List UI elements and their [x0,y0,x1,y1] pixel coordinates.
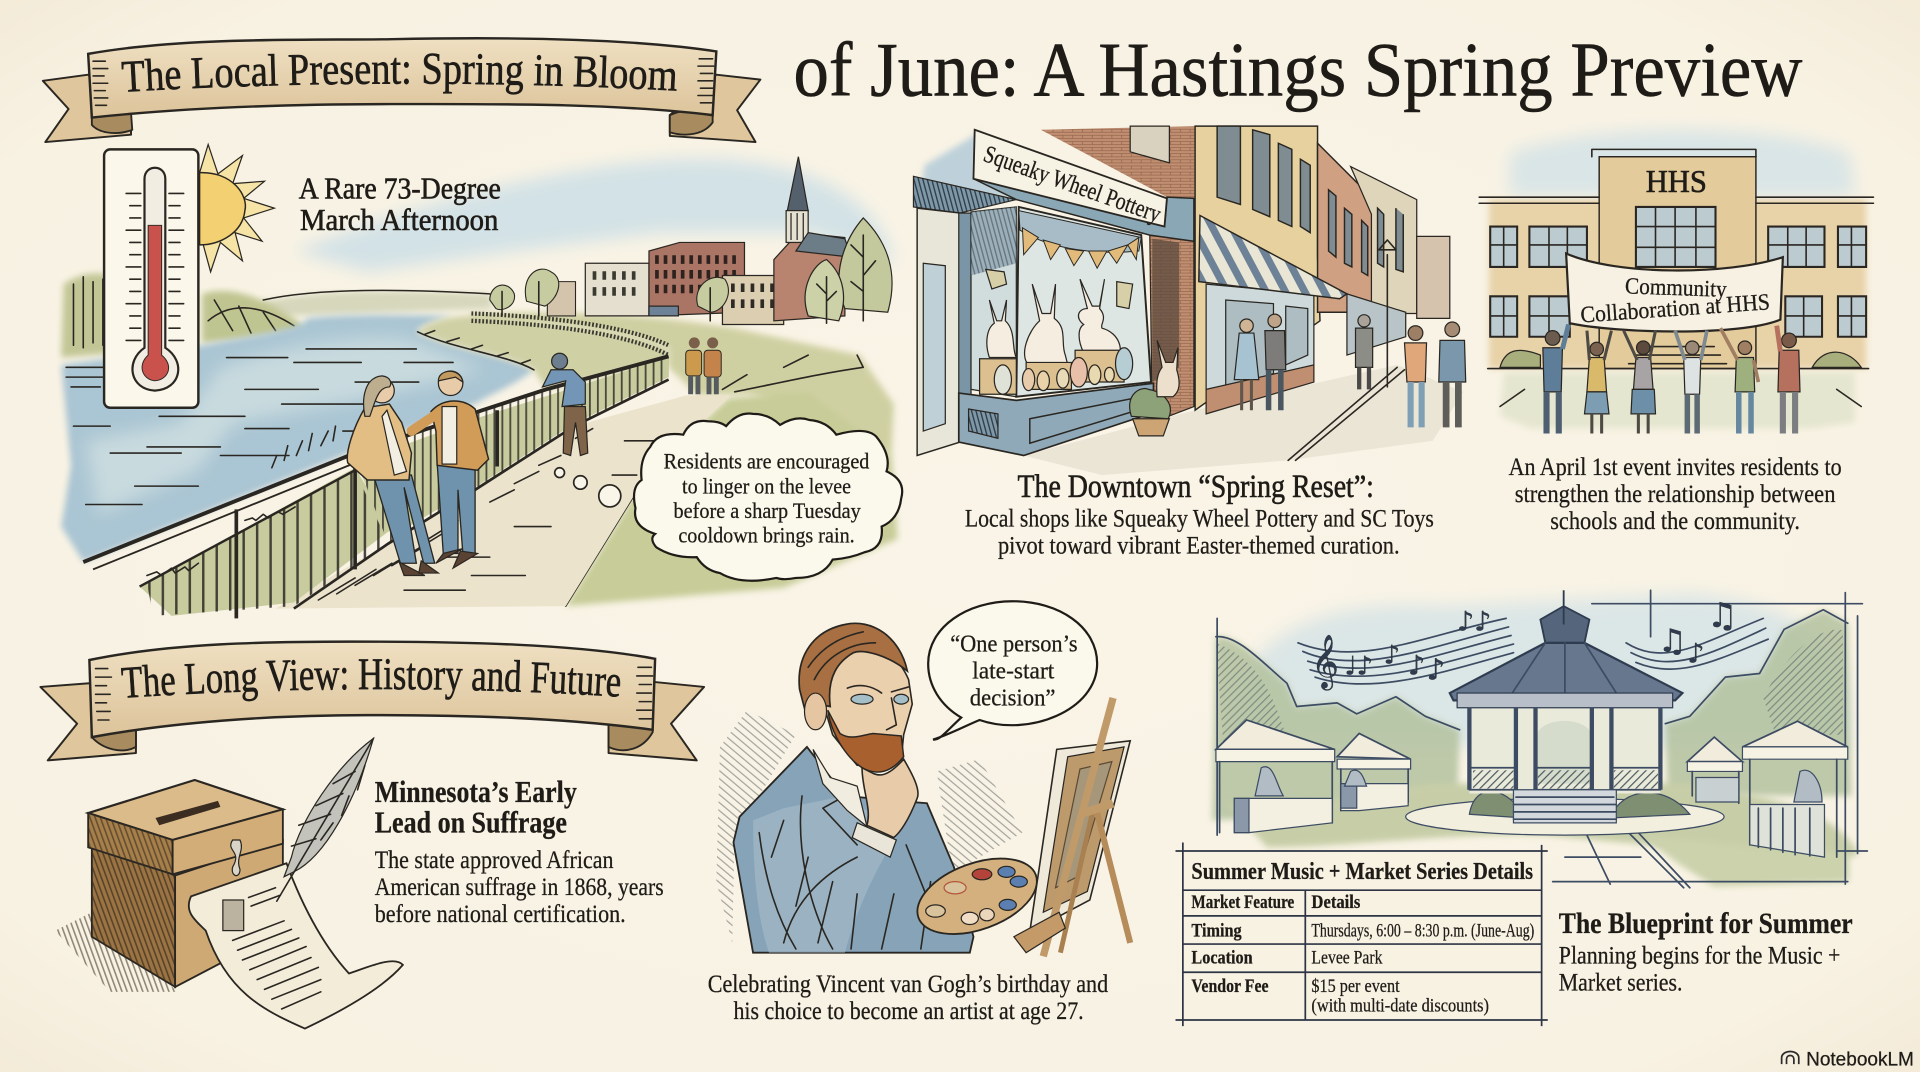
buildings behind [1041,126,1450,410]
illustration: riverside levee scene [61,157,898,618]
banner: The Long View [39,640,706,762]
illustration: gazebo and market blueprint [1212,590,1867,888]
blueprint lines [1217,590,1867,884]
thought bubble: to linger on the levee [682,473,851,498]
text: April 1st event: schools and the community. [1550,506,1800,535]
thought bubble: cooldown brings rain. [678,522,855,547]
music notes left: ♩♪ [1344,652,1373,682]
table rows: Location [1191,948,1253,969]
walkway shadows [318,429,656,600]
music notes left: ♪ [1408,651,1425,682]
sidewalk [1024,365,1463,475]
table rows: Timing [1191,921,1242,942]
illustration: Hastings High School [1479,130,1873,433]
market series table [1176,842,1548,1026]
far bank greenery [61,273,492,358]
NotebookLM watermark: NotebookLM [1806,1049,1914,1070]
banner: The Local Present [42,37,762,143]
text: April 1st event [1509,452,1842,535]
text: blueprint for summer [1559,908,1853,997]
music notes left: ♪♪ [1457,607,1492,638]
people talking [347,371,489,576]
ballot box [88,780,283,987]
music notes right: ♫ [1658,621,1687,659]
bunny statue [1157,340,1179,397]
distant walkers [686,337,721,394]
text: Minnesota suffrage: Minnesota’s Early [375,775,577,809]
parchment scroll [189,863,403,1029]
community banner: Collaboration at HHS [1580,289,1771,328]
music notes left: ♪ [1427,653,1445,687]
table rows: Vendor Fee [1191,976,1269,997]
shore and levee lawn [418,312,898,606]
community banner [1566,253,1783,332]
text: Minnesota suffrage: The state approved African [375,845,614,874]
box shadow [55,912,178,992]
blue shop front [913,130,1194,456]
table rows: Market Feature [1191,892,1294,913]
text: Minnesota suffrage: American suffrage in 1868, years [375,872,664,901]
lawn and steps [1488,347,1869,429]
palette [907,844,1047,949]
text: downtown spring reset: Local shops like Squeaky Wheel Pottery and SC Toys [965,504,1434,533]
hanging ornaments [986,269,1133,309]
text: van Gogh caption [708,969,1108,1025]
brick column [1150,235,1194,422]
text: blueprint for summer: Planning begins for the Music + [1559,941,1840,970]
lamp post and kerb [1288,240,1404,460]
text: downtown spring reset: pivot toward vibrant Easter-themed curation. [998,530,1400,559]
wash behind shops [918,132,1016,208]
lawn [1224,784,1859,864]
main window [1016,207,1151,397]
table rows: Levee Park [1311,948,1383,969]
text: Minnesota suffrage: before national certification. [375,899,626,928]
thermometer card [104,149,198,408]
river [61,315,534,562]
background hatching [716,710,1022,943]
speech bubble: “One person’s [950,630,1078,657]
group holding banner [1543,324,1800,433]
shop sign [973,130,1167,228]
text: blueprint for summer: Market series. [1559,968,1682,997]
music notes right: ♪ [1687,638,1705,669]
sky wash [294,159,894,272]
sky wash [1237,594,1849,747]
walkway [276,396,731,609]
banner: The Long View: The Long View: History and Future [120,658,620,702]
music notes right: ♫ [1707,596,1738,636]
thought bubble [555,414,902,581]
school building: HHS [1646,164,1707,199]
sky wash [1510,130,1855,196]
bunting [1022,228,1139,268]
base panel [959,383,1153,456]
illustration: Vincent van Gogh with palette and easel [716,601,1130,956]
jacket [733,747,973,953]
table title: Summer Music + Market Series Details [1191,858,1533,885]
door and frame [917,208,960,456]
awning hatch [913,176,1016,213]
quill [277,738,373,901]
paved path [1558,830,1690,888]
window bunnies [987,279,1120,365]
text: Minnesota suffrage [375,775,664,928]
balustrade along levee [471,313,669,355]
trees [490,218,892,323]
text: downtown spring reset [965,469,1434,559]
shop sign: Squeaky Wheel Pottery [980,141,1165,228]
gazebo [1406,590,1724,835]
text: temperature heading [299,171,501,237]
text: Minnesota suffrage: Lead on Suffrage [375,806,567,840]
table rows: $15 per event [1311,976,1400,997]
hand on chin and cuff [862,759,918,838]
thought bubble: before a sharp Tuesday [673,498,861,523]
thought bubble: Residents are encouraged [664,448,870,473]
collar and cravat [813,749,867,827]
icon: sun [198,144,274,272]
fascia [973,179,1194,241]
music notes right [1626,596,1768,669]
side glass [971,207,1016,397]
illustration: ballot box with scroll and quill [55,738,403,1029]
community banner: Community [1625,273,1727,303]
easel [1014,698,1130,956]
head and hair [799,623,912,772]
shop two [1199,216,1406,414]
distant town [547,157,851,324]
pedestrians [1234,314,1466,427]
potted plant [1130,389,1170,436]
market stalls [1216,720,1848,857]
table rows: Thursdays, 6:00 – 8:30 p.m. (June-Aug) [1311,921,1534,942]
text: temperature heading: A Rare 73-Degree [299,171,501,205]
table rows [1191,892,1534,1016]
text: blueprint for summer: The Blueprint for Summer [1559,908,1853,940]
banner: The Local Present: The Local Present: Spring in Bloom [121,53,677,95]
fence [83,356,669,618]
title: of June: A Hastings Spring Preview [793,27,1803,113]
text: downtown spring reset: The Downtown “Spring Reset”: [1018,469,1374,505]
speech bubble [928,601,1097,740]
music notes left [1298,607,1513,691]
speech bubble: decision” [970,684,1056,711]
text: April 1st event: strengthen the relationship between [1515,479,1836,508]
text: April 1st event: An April 1st event invites residents to [1509,452,1842,481]
table rows: (with multi-date discounts) [1311,995,1489,1016]
text: van Gogh caption: his choice to become an artist at age 27. [733,996,1084,1025]
school building [1479,149,1873,369]
crates and eggs [980,348,1133,394]
music notes left: 𝄞 [1311,634,1339,691]
speech bubble: late-start [972,657,1054,684]
music notes left: ♪ [1384,641,1400,671]
text: van Gogh caption: Celebrating Vincent van Gogh’s birthday and [708,969,1108,998]
table rows: Details [1311,892,1360,913]
text: temperature heading: March Afternoon [300,203,498,237]
tree washes [1212,610,1851,820]
person leaning on rail [542,353,588,456]
illustration: downtown storefronts [913,126,1466,475]
